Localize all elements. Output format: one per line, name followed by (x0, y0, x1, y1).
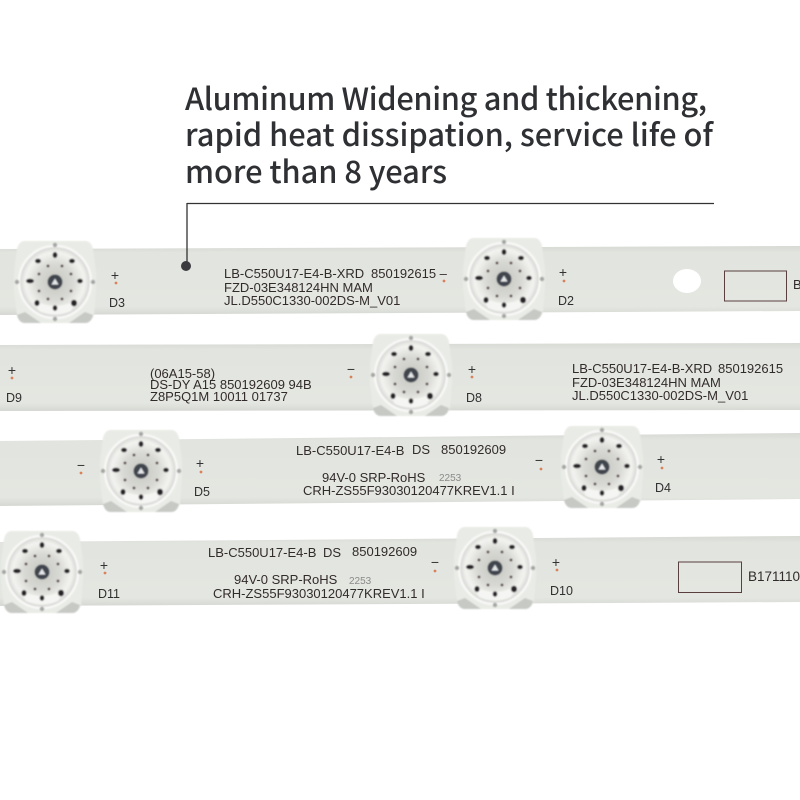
LED lens D5 (100, 430, 182, 512)
strip 3 print: LB-C550U17-E4-B (296, 443, 404, 458)
strip 2 print: DS-DY A15 850192609 94B (150, 377, 312, 392)
strip 4 print: D10 (550, 584, 573, 598)
strip 4 print: DS (323, 545, 341, 560)
LED lens D11 (1, 531, 83, 613)
panel: LED strip 3 (0, 426, 800, 512)
strip 1 print: LB-C550U17-E4-B-XRD (224, 266, 364, 281)
LED lens D10 (454, 527, 536, 609)
strip 3 print: DS (412, 442, 430, 457)
strip 2 print: + (468, 361, 476, 377)
strip 1 print: 850192615 – (371, 266, 448, 281)
strip 2 print: FZD-03E348124HN MAM (572, 375, 721, 390)
strip 2 print: 850192615 (718, 361, 783, 376)
strip 3 print: 2253 (439, 473, 462, 484)
strip 2 print: Z8P5Q1M 10011 01737 (150, 389, 288, 404)
strip 3 print (77, 442, 671, 499)
strip 3 print: − (535, 452, 543, 468)
strip 4 print: B171110 (748, 569, 800, 584)
panel: LED strip 2 (0, 334, 800, 416)
label box (678, 562, 742, 592)
panel: LED strip 1 (0, 241, 800, 323)
strip 3 print: 94V-0 SRP-RoHS (322, 470, 426, 485)
strip 4 print: 94V-0 SRP-RoHS (234, 572, 338, 587)
strip 1 print: + (111, 267, 119, 283)
strip 2 print: − (347, 361, 355, 377)
title (185, 74, 714, 192)
strip 3 print: D4 (655, 481, 671, 495)
title: Aluminum Widening and thickening, (185, 74, 707, 119)
strip 1 print: FZD-03E348124HN MAM (224, 280, 373, 295)
strip 4 print: 850192609 (352, 544, 417, 559)
strip 4 print (98, 544, 800, 601)
LED lens D4 (561, 426, 643, 508)
strip 3 print: D5 (194, 485, 210, 499)
strip 3 print: + (657, 451, 665, 467)
LED lens D8 (370, 334, 452, 416)
strip 2 print: (06A15-58) (150, 366, 215, 381)
strip 2 print: + (8, 362, 16, 378)
strip 2 print (6, 361, 783, 405)
strip 1 print: JL.D550C1330-002DS-M_V01 (224, 293, 400, 308)
strip 4 print: 2253 (349, 576, 372, 587)
strip 4 print: + (552, 554, 560, 570)
strip 1 print: + (559, 264, 567, 280)
strip 4 print: + (100, 557, 108, 573)
strip 4 print: − (431, 554, 439, 570)
strip 2 print: JL.D550C1330-002DS-M_V01 (572, 388, 748, 403)
strip 4 print: D11 (98, 587, 120, 601)
strip 3 print: − (77, 457, 85, 473)
strip 2 print: D8 (466, 391, 482, 405)
strip 1 print: D2 (558, 294, 574, 308)
title: rapid heat dissipation, service life of (185, 110, 714, 155)
strip 1 print: D3 (109, 296, 125, 310)
strip 4 print: LB-C550U17-E4-B (208, 545, 316, 560)
label box (724, 271, 786, 301)
title: more than 8 years (185, 147, 447, 192)
LED lens D2 (463, 238, 545, 320)
strip 2 print: D9 (6, 391, 22, 405)
strip 2 print: LB-C550U17-E4-B-XRD (572, 361, 712, 376)
strip 1 print (109, 264, 800, 310)
strip 3 print: CRH-ZS55F93030120477KREV1.1 I (303, 483, 515, 498)
strip 4 print: CRH-ZS55F93030120477KREV1.1 I (213, 586, 425, 601)
callout leader line (181, 203, 714, 271)
strip 3 print: + (196, 455, 204, 471)
panel: LED strip 4 (0, 527, 800, 613)
strip 3 print: 850192609 (441, 442, 506, 457)
LED lens D3 (14, 241, 96, 323)
mounting hole (673, 269, 701, 293)
